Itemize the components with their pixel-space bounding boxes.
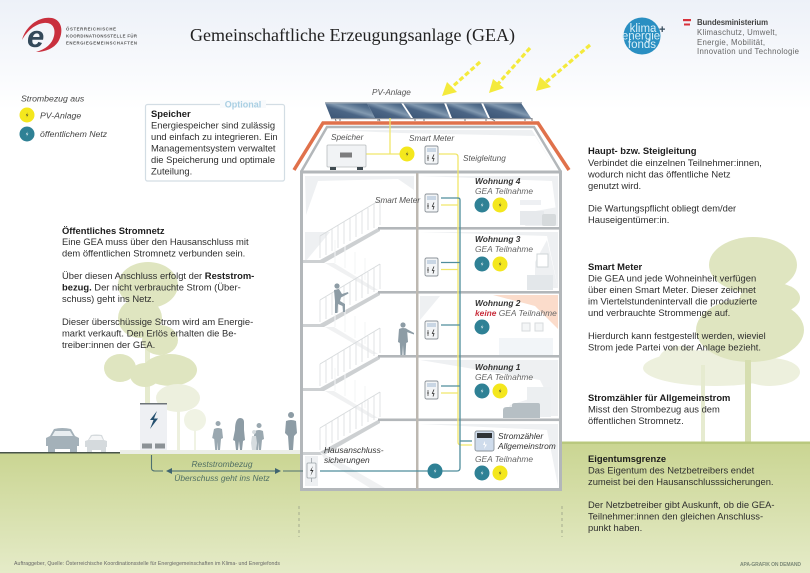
text: Stromzähler für Allgemeinstrom: Stromzähler für Allgemeinstrom (588, 392, 730, 403)
logo: Koordinationsstelle: ENERGIEGEMEINSCHAFTEN (66, 40, 137, 46)
logo: Koordinationsstelle: ÖSTERREICHISCHE (66, 26, 116, 32)
logo: Klima- und Energiefonds: + (659, 24, 665, 36)
roof PV feed and meter (400, 134, 454, 164)
Wohnung 3: GEA Teilnahme (475, 244, 533, 254)
Hausanschlusssicherungen: Hausanschluss- (324, 445, 384, 455)
text: Öffentliches Stromnetz: bezug. Der nicht verbrauchte Strom (Über- (62, 282, 241, 292)
roof inner (301, 127, 561, 172)
text: Eigentumsgrenze: Der Netzbetreiber gibt Auskunft, ob die GEA- (588, 499, 775, 510)
solar panels (325, 102, 532, 121)
text: Eigentumsgrenze (588, 453, 775, 533)
Wohnung 1: GEA Teilnahme (475, 372, 533, 382)
wiring teal (320, 198, 472, 471)
ground (0, 442, 810, 573)
Wohnung 4: GEA Teilnahme (475, 186, 533, 196)
storage unit (327, 133, 366, 170)
text: Eigentumsgrenze: Teilnehmer:innen den gleichen Anschluss- (588, 510, 763, 522)
Wohnung 3 (474, 234, 553, 290)
text: Smart Meter: im Viertelstundenintervall die produzierte (588, 296, 757, 306)
trees right (643, 237, 804, 444)
sun rays (442, 45, 590, 96)
Hausanschlusssicherungen (307, 445, 442, 482)
panel: Speicher optional: Speicher (151, 108, 191, 119)
cars (46, 428, 107, 452)
text: Steigleitung: Hauseigentümer:in. (588, 214, 669, 225)
building interior (301, 127, 561, 489)
text: Öffentliches Stromnetz: treiber:innen der GEA. (62, 339, 155, 350)
text: Eigentumsgrenze: Eigentumsgrenze (588, 453, 666, 464)
panel: Speicher optional: Energiespeicher sind zulässig (151, 120, 275, 130)
building (294, 123, 569, 491)
Wohnung 4: Wohnung 4 (475, 176, 521, 186)
background sky (0, 0, 810, 110)
people in stairwell (334, 283, 414, 355)
label: PV-Anlage: PV-Anlage (372, 88, 411, 97)
panel: Speicher optional: und einfach zu integrieren. Ein (151, 131, 278, 142)
Hausanschlusssicherungen: sicherungen (324, 455, 370, 465)
text: Smart Meter: und verbrauchte Strommenge auf. (588, 307, 730, 318)
roof PV feed and meter: Smart Meter (409, 134, 454, 143)
text: Smart Meter (588, 261, 766, 352)
text: Steigleitung: Haupt- bzw. Steigleitung (588, 145, 697, 156)
logo: Bundesministerium: Bundesministerium (697, 18, 768, 27)
text: Steigleitung: Die Wartungspflicht obliegt dem/der (588, 202, 736, 214)
panel: Speicher optional: die Speicherung und optimale (151, 154, 275, 165)
Stromzähler Allgemeinstrom: Stromzähler (498, 431, 544, 441)
Wohnung 4 (474, 176, 556, 226)
smart meters (375, 194, 438, 399)
logo: Bundesministerium: Innovation und Technologie (697, 47, 799, 56)
logo: Bundesministerium (683, 18, 799, 56)
text: Öffentliches Stromnetz: Dieser überschüssige Strom wird am Energie- (62, 316, 253, 327)
logo: Bundesministerium: Energie, Mobilität, (697, 38, 765, 47)
Wohnung 1: Wohnung 1 (475, 362, 521, 372)
text: Öffentliches Stromnetz: Über diesen Anschluss erfolgt der Reststrom- (62, 270, 254, 281)
stairs (303, 200, 380, 263)
Wohnung 1 (474, 362, 551, 418)
text: Öffentliches Stromnetz (62, 225, 254, 350)
text: Steigleitung: Verbindet die einzelnen Teilnehmer:innen, (588, 157, 762, 168)
text: Öffentliches Stromnetz: markt verkauft. Den Erlös erhalten die Be- (62, 328, 237, 338)
Wohnung 2: Wohnung 2 (475, 298, 521, 308)
logo: Klima- und Energiefonds: fonds (628, 39, 656, 51)
text: Öffentliches Stromnetz: schuss) geht ins Netz. (62, 293, 154, 304)
text: Eigentumsgrenze: punkt haben. (588, 522, 642, 533)
label: Steigleitung: Steigleitung (463, 154, 506, 163)
Wohnung 2 (474, 298, 557, 355)
room shading (305, 130, 558, 486)
Wohnung 2: keine GEA Teilnahme (475, 308, 557, 318)
title: Gemeinschaftliche Erzeugungsanlage (GEA) (190, 25, 515, 46)
arrow: Reststrombezug (166, 459, 281, 483)
legend: Strombezug aus: Strombezug aus (21, 94, 85, 104)
logo: Klima- und Energiefonds: klima (630, 23, 657, 35)
footer credit: APA-GRAFIK ON DEMAND (740, 562, 801, 568)
logo: Klima- und Energiefonds (622, 18, 665, 54)
text: Eigentumsgrenze: Das Eigentum des Netzbetreibers endet (588, 464, 755, 476)
panel: Speicher optional (146, 100, 284, 181)
text: Smart Meter: Hierdurch kann festgestellt werden, wieviel (588, 330, 766, 341)
text: Smart Meter: über einen Smart Meter. Dieser zeichnet (588, 284, 756, 295)
text: Öffentliches Stromnetz: Öffentliches Stromnetz (62, 225, 165, 236)
floors and walls (300, 170, 562, 491)
roof orange (294, 123, 569, 170)
orange room wedge (493, 295, 558, 329)
text: Öffentliches Stromnetz: Eine GEA muss über den Hausanschluss mit (62, 236, 249, 247)
storage unit: Speicher (331, 133, 364, 142)
logo: Klima- und Energiefonds: energie (622, 30, 660, 42)
pedestrians (212, 412, 297, 450)
text: Stromzähler für Allgemeinstrom: Misst den Strombezug aus dem (588, 404, 720, 414)
text: Steigleitung: wodurch nicht das öffentliche Netz (587, 168, 731, 180)
Stromzähler Allgemeinstrom: GEA Teilnahme (475, 454, 533, 464)
text: Eigentumsgrenze: zumeist bei den Hausanschlusssicherungen. (588, 476, 774, 487)
logo: Koordinationsstelle (22, 18, 138, 54)
panel: Speicher optional: Optional (225, 100, 261, 110)
wiring yellow (366, 118, 472, 445)
logo: Koordinationsstelle: e (27, 19, 44, 54)
logo: Bundesministerium: Klimaschutz, Umwelt, (697, 28, 777, 37)
arrow: Reststrombezug: Reststrombezug (192, 459, 253, 469)
Stromzähler Allgemeinstrom: Allgemeinstrom (497, 441, 556, 451)
legend: Strombezug aus: öffentlichem Netz (40, 129, 108, 139)
text: Stromzähler für Allgemeinstrom: öffentlichen Stromnetz. (588, 415, 684, 426)
text: Smart Meter: Strom jede Partei von der Anlage bezieht. (588, 342, 761, 352)
text: Smart Meter: Die GEA und jede Wohneinheit verfügen (588, 272, 756, 284)
logo: Koordinationsstelle: KOORDINATIONSSTELLE FÜR (66, 34, 138, 38)
grid cabinet (140, 403, 167, 450)
text: Smart Meter: Smart Meter (588, 261, 643, 272)
text: Steigleitung (587, 145, 762, 225)
trees left (104, 262, 206, 452)
Stromzähler Allgemeinstrom (474, 431, 556, 480)
legend: Strombezug aus (20, 94, 108, 142)
property boundary markers (299, 506, 562, 537)
footer source: Auftraggeber, Quelle: Österreichische Koordinationsstelle für Energiegemeinschaften im Klima- und Energiefonds (14, 560, 280, 567)
panel: Speicher optional: Managementsystem verwaltet (151, 142, 276, 154)
legend: Strombezug aus: PV-Anlage (40, 110, 81, 120)
smart meters: Smart Meter (375, 196, 420, 205)
street cables (152, 455, 303, 471)
panel: Speicher optional: Zuteilung. (151, 166, 192, 176)
arrow: Reststrombezug: Überschuss geht ins Netz (174, 473, 271, 483)
text: Stromzähler für Allgemeinstrom (588, 392, 730, 426)
text: Steigleitung: genutzt wird. (588, 180, 641, 191)
text: Öffentliches Stromnetz: dem öffentlichen Stromnetz verbunden sein. (62, 248, 245, 258)
Wohnung 3: Wohnung 3 (475, 234, 521, 244)
